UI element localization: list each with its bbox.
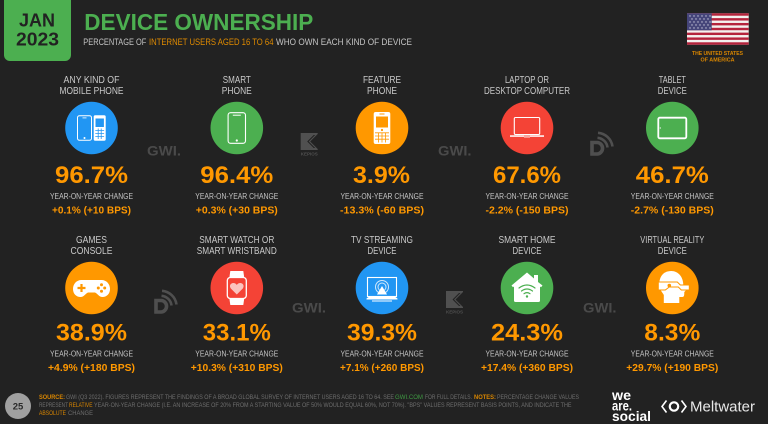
panel: feature phone: 3.9%: [353, 162, 410, 189]
panel: virtual reality device: +29.7% (+190 BPS): [626, 363, 718, 374]
panel: smart home device: [481, 235, 573, 374]
source notes: PERCENTAGE CHANGE VALUES: [497, 395, 579, 401]
icon: laptop: [501, 102, 553, 154]
panel: virtual reality device: VIRTUAL REALITY: [640, 235, 705, 246]
page number: [5, 393, 31, 419]
panel: tablet device: 46.7%: [636, 162, 709, 189]
panel: tv streaming device: [340, 235, 424, 374]
panel: feature phone: YEAR-ON-YEAR CHANGE: [340, 191, 424, 201]
panel: tv streaming device: TV STREAMING: [351, 235, 413, 246]
subtitle: INTERNET USERS AGED 16 TO 64: [149, 37, 274, 47]
panel: games console: +4.9% (+180 BPS): [48, 363, 135, 374]
panel: smart watch or smart wristband: SMART WRISTBAND: [197, 246, 277, 257]
panel: smart phone: [195, 75, 279, 216]
panel: smart phone: YEAR-ON-YEAR CHANGE: [195, 191, 279, 201]
panel: tv streaming device: YEAR-ON-YEAR CHANGE: [340, 349, 424, 359]
watermark: GWI 3: GWI.: [292, 300, 326, 316]
panel: games console: [48, 235, 135, 374]
panel: virtual reality device: DEVICE: [658, 246, 687, 257]
icon: smart watch: [210, 262, 263, 314]
flag caption: OF AMERICA: [700, 58, 735, 64]
watermark: Kepios 2: KEPIOS: [446, 310, 463, 314]
panel: tablet device: YEAR-ON-YEAR CHANGE: [631, 191, 714, 201]
panel: smart watch or smart wristband: YEAR-ON-YEAR CHANGE: [195, 349, 279, 359]
panel: smart watch or smart wristband: 33.1%: [203, 320, 271, 347]
flag caption: THE UNITED STATES: [692, 51, 743, 57]
source notes: REPRESENT: [39, 403, 68, 409]
panel: any kind of mobile phone: [50, 75, 133, 216]
watermark: DataReportal 1: [592, 133, 612, 154]
panel: smart watch or smart wristband: +10.3% (+310 BPS): [191, 363, 283, 374]
panel: laptop or desktop computer: -2.2% (-150 BPS): [486, 205, 568, 216]
watermark: GWI 2: GWI.: [438, 143, 472, 159]
page number: 25: [13, 402, 24, 412]
panel: laptop or desktop computer: YEAR-ON-YEAR CHANGE: [486, 191, 569, 201]
panel: any kind of mobile phone: MOBILE PHONE: [60, 86, 124, 97]
panel: games console: GAMES: [76, 235, 107, 246]
panel: smart phone: PHONE: [222, 86, 252, 97]
panel: tv streaming device: DEVICE: [368, 246, 397, 257]
flag caption: [692, 51, 743, 64]
icon: tablet: [646, 102, 699, 154]
watermark: DataReportal 2: [156, 291, 176, 312]
logo: we are social: we: [611, 388, 632, 403]
panel: smart phone: SMART: [223, 75, 251, 86]
icon: vr headset: [646, 262, 699, 314]
panel: virtual reality device: YEAR-ON-YEAR CHANGE: [631, 349, 714, 359]
panel: tv streaming device: +7.1% (+260 BPS): [340, 363, 424, 374]
source notes: [39, 395, 579, 417]
panel: smart home device: 24.3%: [491, 320, 563, 347]
panel: smart phone: +0.3% (+30 BPS): [196, 205, 278, 216]
panel: any kind of mobile phone: +0.1% (+10 BPS): [52, 205, 131, 216]
panel: feature phone: PHONE: [367, 86, 397, 97]
source notes: ABSOLUTE: [39, 411, 66, 417]
icon: streaming tv: [356, 262, 408, 314]
panel: any kind of mobile phone: ANY KIND OF: [64, 75, 120, 86]
watermark: GWI 1: GWI.: [147, 143, 181, 159]
logo: Meltwater: Meltwater: [690, 398, 755, 416]
subtitle: WHO OWN EACH KIND OF DEVICE: [276, 37, 412, 47]
panel: smart phone: 96.4%: [200, 162, 274, 189]
watermark: Kepios 1: KEPIOS: [301, 152, 318, 156]
panel: laptop or desktop computer: LAPTOP OR: [505, 75, 549, 86]
panel: tablet device: -2.7% (-130 BPS): [631, 205, 714, 216]
panel: feature phone: FEATURE: [363, 75, 401, 86]
flag: United States: [687, 13, 749, 45]
panel: smart watch or smart wristband: [191, 235, 283, 374]
icon: smart home: [501, 262, 553, 314]
panel: virtual reality device: [626, 235, 718, 374]
watermark: GWI 4: GWI.: [583, 300, 616, 316]
source notes: YEAR-ON-YEAR CHANGE (I.E. AN INCREASE OF 20% FROM A STARTING VALUE OF 50% WOULD EQUAL 60%, NOT 70%). "BPS" VALUES REPRESENT BASIS POINTS, AND INDICATE THE: [94, 403, 572, 409]
logo: we are social: social: [612, 409, 651, 424]
icon: mobile phones: [65, 102, 118, 154]
source notes: RELATIVE: [69, 403, 92, 409]
panel: any kind of mobile phone: 96.7%: [55, 162, 128, 189]
icon: game controller: [65, 262, 118, 314]
source notes: FOR FULL DETAILS.: [425, 395, 472, 401]
panel: any kind of mobile phone: YEAR-ON-YEAR CHANGE: [50, 191, 133, 201]
date badge: [4, 0, 71, 61]
panel: feature phone: [340, 75, 424, 216]
icon: feature phone: [356, 102, 408, 154]
source notes: GWI (Q3 2022). FIGURES REPRESENT THE FINDINGS OF A BROAD GLOBAL SURVEY OF INTERNET USERS AGED 16 TO 64. SEE: [66, 395, 394, 401]
panel: smart home device: +17.4% (+360 BPS): [481, 363, 573, 374]
panel: smart home device: SMART HOME: [498, 235, 556, 246]
panel: virtual reality device: 8.3%: [644, 320, 701, 347]
panel: laptop or desktop computer: DESKTOP COMPUTER: [484, 86, 570, 97]
title: DEVICE OWNERSHIP: [84, 9, 313, 35]
source notes: SOURCE:: [39, 395, 65, 401]
panel: games console: YEAR-ON-YEAR CHANGE: [50, 349, 133, 359]
logo: we are social: [611, 388, 651, 424]
panel: games console: CONSOLE: [70, 246, 113, 257]
panel: tv streaming device: 39.3%: [347, 320, 417, 347]
date badge: 2023: [16, 30, 59, 50]
panel: games console: 38.9%: [56, 320, 127, 347]
panel: laptop or desktop computer: 67.6%: [493, 162, 561, 189]
source notes: CHANGE: [68, 411, 93, 417]
icon: smartphone: [210, 102, 263, 154]
panel: tablet device: DEVICE: [658, 86, 687, 97]
panel: smart watch or smart wristband: SMART WATCH OR: [199, 235, 274, 246]
watermark: Kepios 1: [301, 133, 318, 156]
logo: we are social: are.: [612, 398, 632, 414]
logo: Meltwater: [662, 398, 755, 416]
source notes: NOTES:: [474, 395, 496, 401]
panel: feature phone: -13.3% (-60 BPS): [340, 205, 424, 216]
panel: tablet device: [631, 75, 714, 216]
panel: laptop or desktop computer: [484, 75, 570, 216]
source notes: GWI.COM: [395, 395, 423, 401]
subtitle: [83, 37, 412, 47]
subtitle: PERCENTAGE OF: [83, 37, 147, 47]
date badge: JAN: [19, 11, 55, 31]
watermark: Kepios 2: [446, 291, 463, 314]
panel: tablet device: TABLET: [659, 75, 686, 86]
panel: smart home device: DEVICE: [512, 246, 542, 257]
panel: smart home device: YEAR-ON-YEAR CHANGE: [486, 349, 569, 359]
